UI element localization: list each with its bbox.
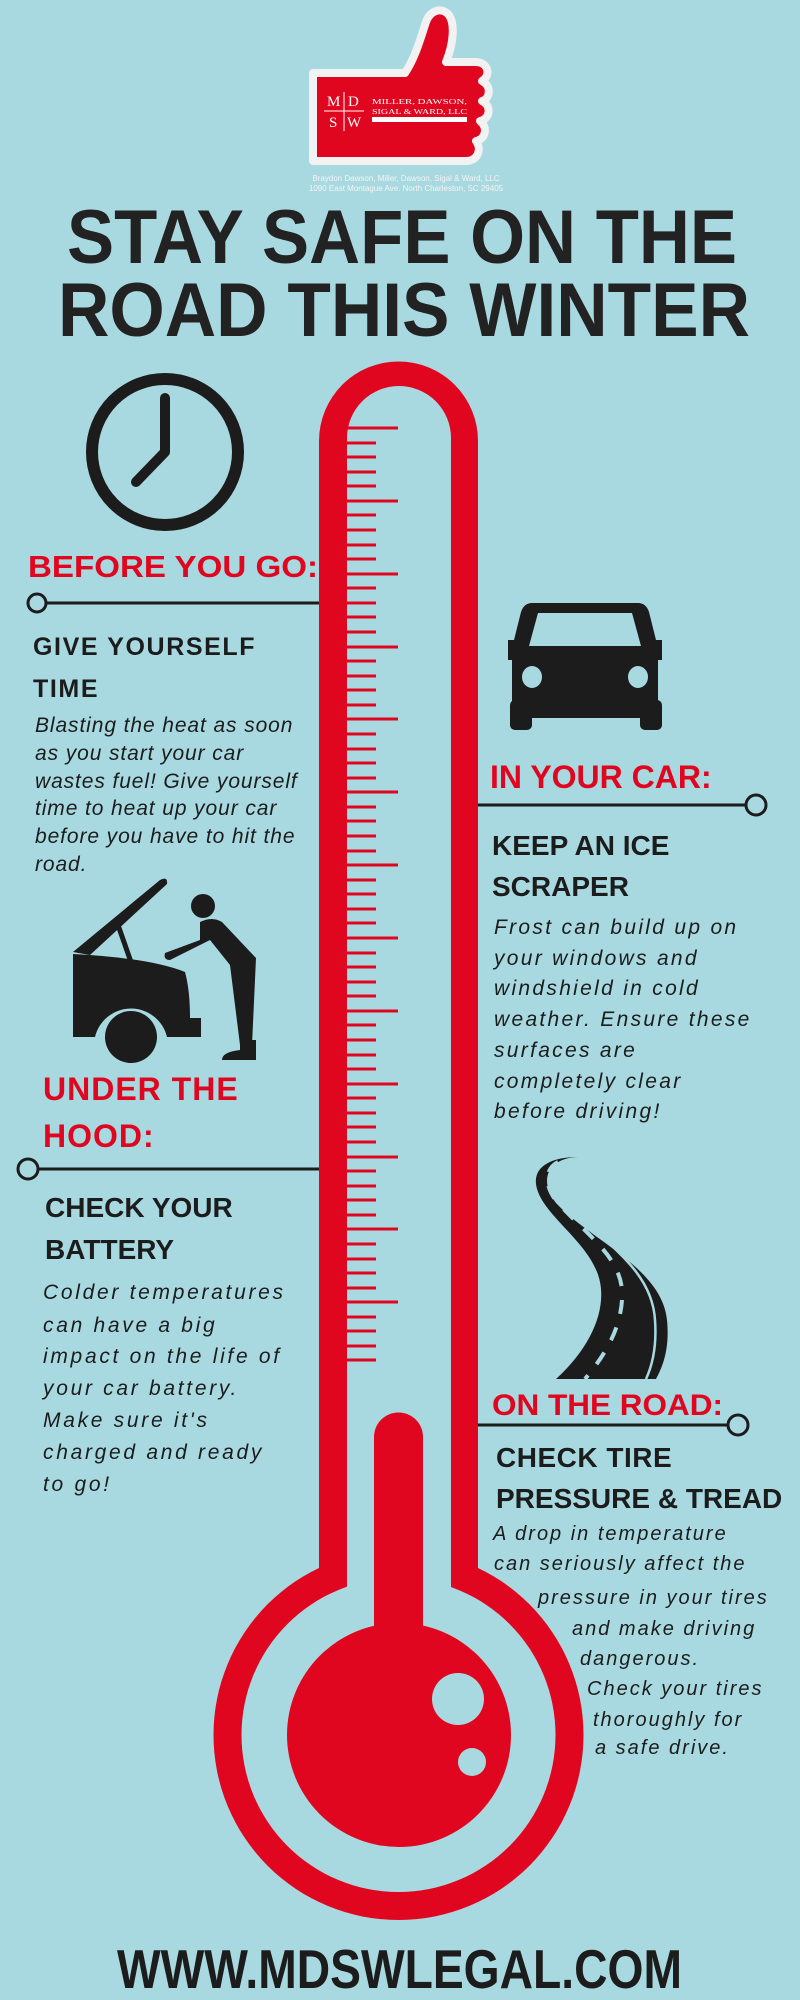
panel: under the hood: HOOD: [43, 1118, 155, 1154]
title: STAY SAFE ON THE [67, 195, 737, 280]
logo: thumbs up: W [347, 115, 362, 131]
address text: Braydon Dawson, Miller, Dawson, Sigal & Ward, LLC [312, 174, 500, 183]
panel: on the road: can seriously affect the [494, 1553, 747, 1575]
panel: under the hood: BATTERY [45, 1234, 174, 1265]
panel: before you go: before you have to hit the [35, 825, 295, 848]
panel: in your car: windshield in cold [494, 977, 700, 1000]
panel: before you go: as you start your car [35, 742, 244, 765]
logo: thumbs up: MILLER, DAWSON, [372, 97, 467, 106]
panel: before you go: wastes fuel! Give yourself [35, 770, 299, 793]
logo: thumbs up [313, 10, 489, 161]
icon: mechanic under the hood [73, 879, 256, 1063]
address text [309, 174, 504, 193]
panel: in your car: SCRAPER [492, 871, 629, 902]
panel: in your car: your windows and [492, 947, 699, 970]
footer url: WWW.MDSWLEGAL.COM [117, 1938, 682, 2000]
panel: before you go: Blasting the heat as soon [35, 714, 293, 737]
panel: on the road: dangerous. [580, 1648, 700, 1670]
panel: under the hood: Make sure it's [43, 1409, 210, 1432]
panel: under the hood: to go! [43, 1473, 112, 1496]
panel: in your car: before driving! [494, 1100, 662, 1123]
panel: under the hood [18, 1071, 319, 1496]
title: ROAD THIS WINTER [58, 268, 750, 353]
thermometer [214, 362, 584, 1920]
panel: on the road: Check your tires [587, 1678, 764, 1700]
panel: before you go [28, 549, 319, 876]
panel: before you go: GIVE YOURSELF [33, 633, 256, 661]
panel: under the hood: CHECK YOUR [45, 1192, 233, 1223]
panel: in your car [478, 759, 766, 1123]
panel: in your car: IN YOUR CAR: [490, 759, 712, 795]
panel: on the road: ON THE ROAD: [492, 1389, 723, 1422]
icon: clock [92, 379, 238, 525]
panel: before you go: BEFORE YOU GO: [28, 549, 318, 584]
panel: on the road: PRESSURE & TREAD [496, 1483, 782, 1514]
icon: winding road [536, 1157, 668, 1379]
panel: under the hood: your car battery. [41, 1377, 239, 1400]
panel: under the hood: can have a big [43, 1314, 217, 1337]
panel: before you go: time to heat up your car [35, 797, 277, 820]
logo: thumbs up: M [327, 94, 340, 110]
panel: before you go: road. [35, 853, 87, 876]
panel: on the road: pressure in your tires [537, 1587, 769, 1609]
panel: on the road [478, 1389, 782, 1759]
panel: before you go: TIME [33, 675, 99, 703]
panel: in your car: weather. Ensure these [494, 1008, 752, 1031]
panel: on the road: CHECK TIRE [496, 1442, 672, 1473]
panel: on the road: a safe drive. [595, 1737, 730, 1759]
address text: 1090 East Montague Ave. North Charleston, SC 29405 [309, 184, 504, 193]
logo: thumbs up: D [348, 94, 359, 110]
icon: car front [508, 603, 662, 730]
panel: on the road: thoroughly for [593, 1709, 743, 1731]
panel: in your car: Frost can build up on [494, 916, 738, 939]
title [58, 195, 750, 353]
logo: thumbs up: SIGAL & WARD, LLC [372, 107, 467, 116]
panel: under the hood: Colder temperatures [43, 1281, 286, 1304]
panel: in your car: KEEP AN ICE [492, 830, 669, 861]
panel: on the road: A drop in temperature [492, 1523, 728, 1545]
panel: on the road: and make driving [572, 1618, 756, 1640]
logo: thumbs up: S [329, 115, 337, 131]
panel: in your car: completely clear [494, 1070, 683, 1093]
panel: under the hood: charged and ready [43, 1441, 264, 1464]
panel: in your car: surfaces are [494, 1039, 637, 1062]
panel: under the hood: impact on the life of [43, 1345, 282, 1368]
panel: under the hood: UNDER THE [43, 1071, 239, 1107]
